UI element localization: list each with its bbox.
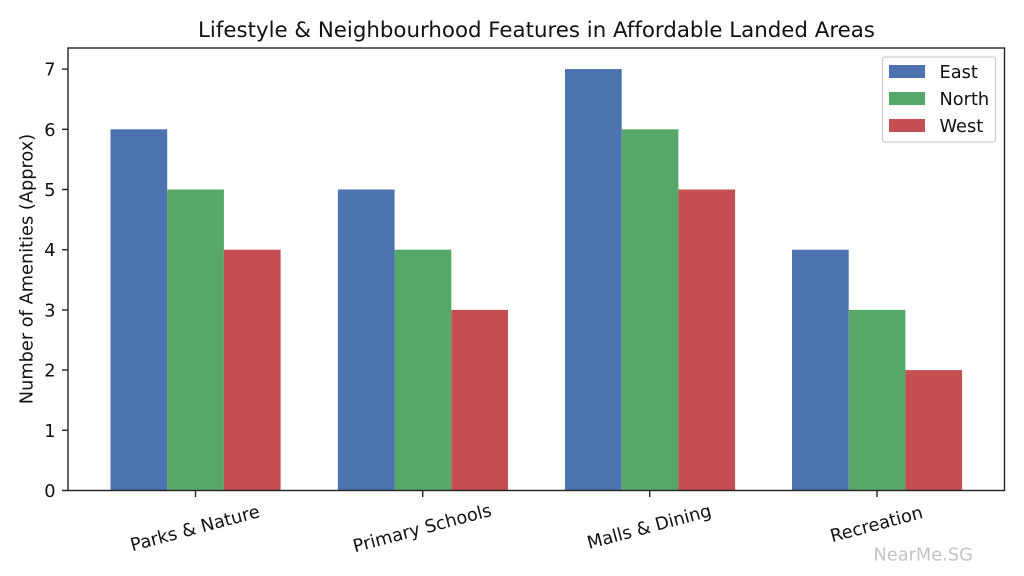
y axis ticks and labels: 5 xyxy=(44,180,56,201)
y axis ticks and labels: 4 xyxy=(44,240,56,261)
legend: West xyxy=(940,116,983,137)
x axis labels: Primary Schools xyxy=(351,500,494,557)
y axis ticks and labels: 7 xyxy=(44,60,56,80)
y axis ticks and labels: 6 xyxy=(44,120,56,141)
watermark: NearMe.SG xyxy=(874,544,973,566)
x axis labels xyxy=(128,500,925,557)
y axis ticks and labels xyxy=(44,60,68,502)
legend: North xyxy=(940,89,989,110)
bars: Recreation xyxy=(792,250,962,490)
bars: Malls & Dining xyxy=(565,69,735,490)
x axis labels: Malls & Dining xyxy=(585,501,714,554)
y axis ticks and labels: 0 xyxy=(44,481,56,502)
x axis labels: Parks & Nature xyxy=(128,501,262,556)
title: Lifestyle & Neighbourhood Features in Affordable Landed Areas xyxy=(198,18,875,43)
bars: Parks & Nature xyxy=(110,129,281,491)
x axis labels: Recreation xyxy=(828,502,925,547)
plot frame xyxy=(68,48,1004,490)
x axis ticks xyxy=(196,490,877,497)
y axis ticks and labels: 3 xyxy=(44,300,56,322)
legend: East xyxy=(940,62,978,83)
bars: Primary Schools xyxy=(338,190,508,490)
y axis ticks and labels: 1 xyxy=(44,421,56,442)
y axis ticks and labels: 2 xyxy=(44,360,56,382)
legend xyxy=(882,57,996,142)
y axis title: Number of Amenities (Approx) xyxy=(16,134,38,404)
